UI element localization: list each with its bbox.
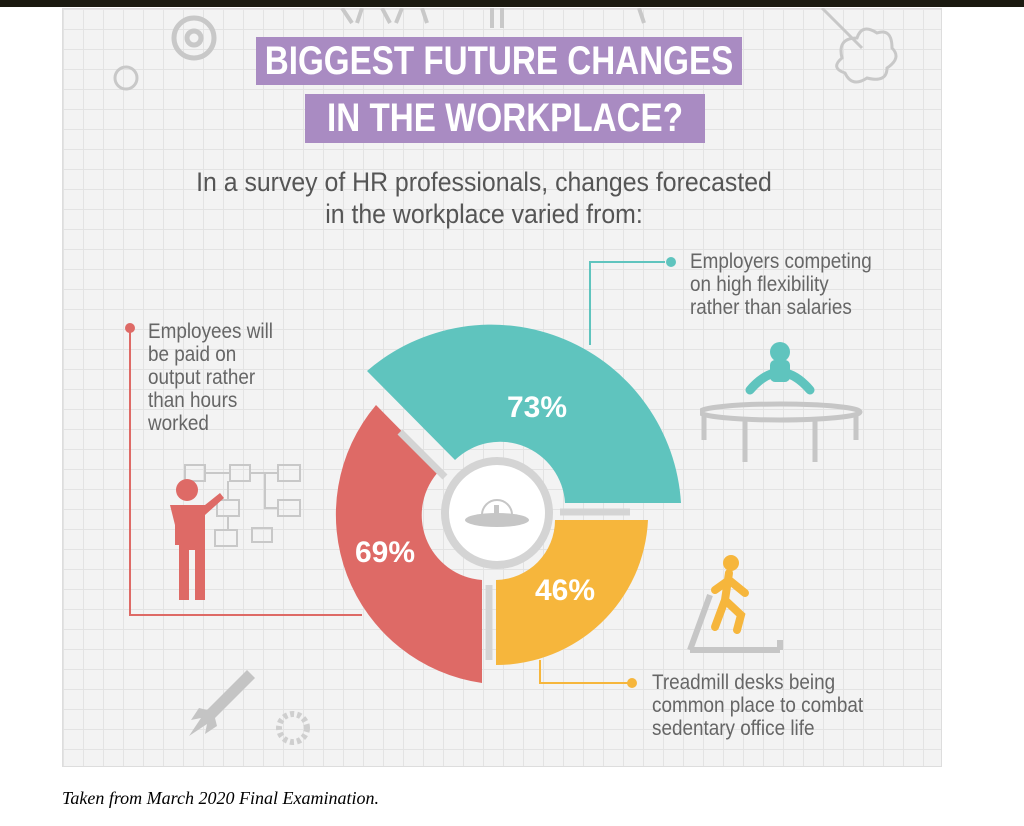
annotation: teal: on high flexibility [690,273,829,296]
title [256,37,742,143]
annotation: red [148,320,273,435]
percentages [355,391,595,607]
icon: person with flowchart [170,464,301,600]
annotation: yellow: sedentary office life [652,717,815,740]
annotation: red: output rather [148,366,255,389]
icon: trampoline [700,342,862,462]
annotation: red: Employees will [148,320,273,343]
percentages: 69% [355,536,415,569]
title: BIGGEST FUTURE CHANGES [265,39,733,83]
icon: treadmill [687,555,783,653]
subtitle [196,167,772,229]
percentages: 73% [507,391,567,424]
annotation: yellow: Treadmill desks being [652,671,835,694]
annotation: red: than hours [148,389,237,412]
percentages: 46% [535,574,595,607]
annotation: teal [690,250,872,319]
annotation: yellow [652,671,863,740]
icon: rocket [189,670,255,736]
annotation: red: be paid on [148,343,236,366]
top black bar [0,0,1024,7]
annotation: teal: Employers competing [690,250,872,273]
annotation: teal: rather than salaries [690,296,852,319]
subtitle: In a survey of HR professionals, changes forecasted [196,167,772,197]
caption: Taken from March 2020 Final Examination. [62,788,379,808]
decorative icons top [114,8,898,745]
segment: teal 73% [367,325,681,503]
annotation: yellow: common place to combat [652,694,863,717]
center hub with UFO icon [445,461,549,565]
annotation: red: worked [148,412,209,435]
subtitle: in the workplace varied from: [325,199,643,229]
segment: red 69% [336,405,482,683]
icon: gear [279,714,307,742]
title: IN THE WORKPLACE? [327,96,683,140]
segment: yellow 46% [496,520,648,665]
panel: background grid [62,8,942,767]
gray gap bars [400,432,630,660]
